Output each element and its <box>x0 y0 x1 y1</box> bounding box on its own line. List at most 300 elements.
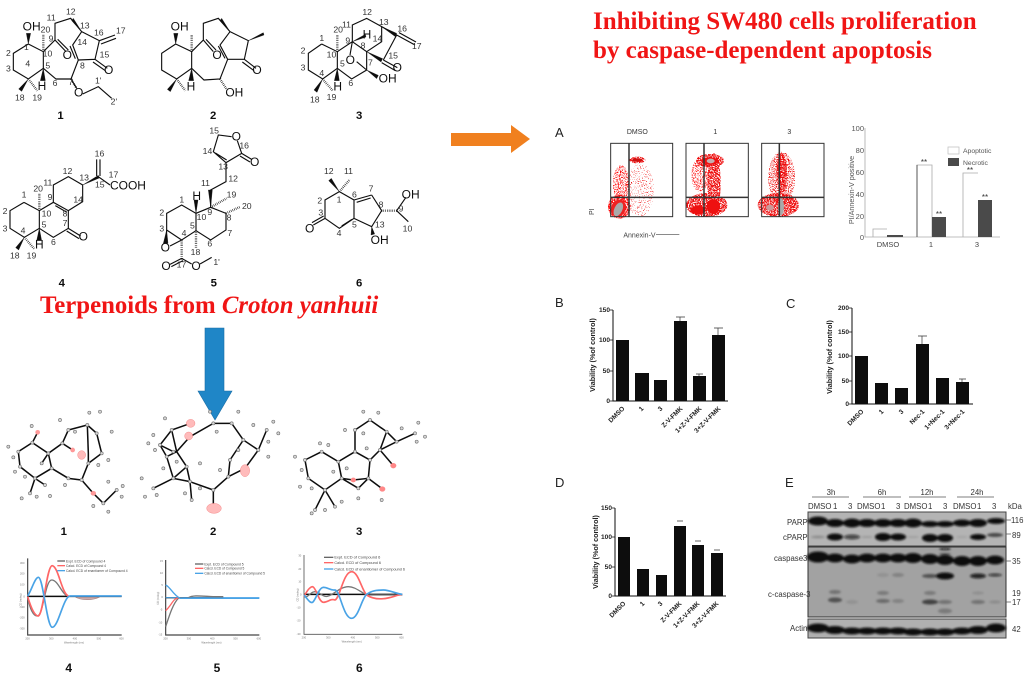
compound 3 structure: O <box>393 61 402 75</box>
lane labels: 3 <box>992 502 996 511</box>
time point headers: 6h <box>878 488 886 497</box>
significance stars: ** <box>936 210 942 219</box>
compound 5 structure: 14 <box>203 146 212 156</box>
compound 5 structure: 5 <box>211 278 217 290</box>
ECD chart compound 4: 300 <box>20 561 25 565</box>
ECD chart compound 6: 200 <box>302 635 307 639</box>
ECD chart compound 6: 600 <box>399 635 404 639</box>
compound 5 structure: 5 <box>190 220 195 230</box>
compound 5 structure: 4 <box>182 228 187 238</box>
panel C: viability bar chart: 3+Nec-1 <box>943 408 967 431</box>
panel C: viability bar chart: DMSO <box>846 408 865 427</box>
compound 5 structure: 8 <box>227 213 232 223</box>
ECD chart compound 6 <box>295 554 405 644</box>
panel C: viability bar chart: 150 <box>838 329 849 336</box>
molecular weight markers: 17 <box>1012 598 1021 607</box>
compound label 5: 5 <box>214 661 221 675</box>
panel: ECD spectra <box>19 554 405 675</box>
panel B: viability bar chart: 100 <box>599 337 610 344</box>
compound 3 structure: 16 <box>397 24 407 34</box>
panel C: viability bar chart: 50 <box>842 378 849 385</box>
compound 1 structure: 18 <box>15 93 25 103</box>
compound 6 structure: 2 <box>317 195 322 205</box>
panel D: viability bar chart: 100 <box>601 534 612 541</box>
time point headers: 3h <box>827 488 835 497</box>
compound 6 structure <box>305 166 420 290</box>
ECD chart compound 5: -10 <box>158 620 163 624</box>
ECD chart compound 6: 30 <box>298 554 302 558</box>
blot bands <box>807 516 1006 636</box>
compound 5 structure: 19 <box>227 189 236 199</box>
crystal structure 3: 3 <box>356 526 362 538</box>
compound 3 structure: O <box>346 53 355 67</box>
compound 3 structure: 18 <box>310 95 320 105</box>
ECD chart compound 5 <box>156 559 265 645</box>
compound 1 structure: 11 <box>47 13 56 23</box>
ECD chart compound 4: -100 <box>19 605 25 609</box>
blot membranes <box>808 512 1006 638</box>
compound 5 structure: 1 <box>179 195 184 205</box>
compound 5 structure: 3 <box>159 224 164 234</box>
molecular weight markers: 19 <box>1012 589 1021 598</box>
compound 1 structure <box>6 6 126 122</box>
panel B: viability bar chart: 150 <box>599 307 610 314</box>
ECD chart compound 4: 500 <box>97 636 102 640</box>
ECD chart compound 6: 300 <box>326 635 331 639</box>
compound 3 structure: 11 <box>342 19 351 29</box>
crystal structure 2: 2 <box>210 526 216 538</box>
compound 2 structure: 2 <box>210 110 216 122</box>
ECD chart compound 6: Wavelength (nm) <box>342 640 362 644</box>
ECD chart compound 4: 300 <box>49 636 54 640</box>
lane labels: 1 <box>928 502 932 511</box>
flow plot compound 3 <box>758 129 824 217</box>
panel B: viability bar chart: Z-V-FMK <box>661 405 685 429</box>
ECD chart compound 5: 5 <box>161 583 163 587</box>
panel D label: D <box>555 475 564 490</box>
compound 3 structure: 15 <box>388 50 398 60</box>
y axis tick labels: 0 <box>860 233 864 242</box>
panel B: viability bar chart: 1 <box>638 405 646 413</box>
compound 4 structure: 6 <box>51 237 56 247</box>
compound 4 structure: 18 <box>10 250 20 260</box>
compound 5 structure: 13 <box>218 161 228 171</box>
significance stars <box>921 158 988 219</box>
compound 1 structure: 5 <box>45 60 50 70</box>
compound 3 structure: 10 <box>327 49 336 59</box>
ECD chart compound 6: -10 <box>297 605 301 609</box>
panel D: viability bar chart: Z-V-FMK <box>660 600 684 624</box>
lane labels: DMSO <box>904 502 927 511</box>
protein labels: caspase3 <box>774 554 807 563</box>
compound 5 structure: 9 <box>207 207 212 217</box>
molecular weight markers: 35 <box>1012 557 1021 566</box>
y axis tick labels: 60 <box>856 168 864 177</box>
ECD chart compound 5: 200 <box>163 636 168 640</box>
ECD chart compound 4: 600 <box>119 636 124 640</box>
compound 4 structure: 17 <box>109 169 118 179</box>
compound 4 structure: H <box>35 238 44 252</box>
compound 5 structure: O <box>161 259 171 273</box>
legend: Apoptotic <box>963 148 992 155</box>
ECD chart compound 6: -20 <box>297 619 301 623</box>
ECD chart compound 5: 600 <box>257 636 262 640</box>
ECD chart compound 4: 400 <box>73 636 78 640</box>
ECD chart compound 4: Wavelength (nm) <box>64 641 84 645</box>
panel: X-ray crystal structures <box>8 412 425 538</box>
ECD chart compound 6: 10 <box>298 579 302 583</box>
compound 5 structure: 6 <box>207 239 212 249</box>
lane labels: DMSO <box>953 502 976 511</box>
compound 6 structure: OH <box>371 233 389 247</box>
panel C: viability bar chart: 0 <box>845 401 849 408</box>
compound 6 structure: 12 <box>324 166 334 176</box>
compound 4 structure: 1 <box>22 190 27 200</box>
ECD chart compound 5: Wavelength (nm) <box>201 641 222 645</box>
ECD chart compound 4: CD (mdeg) <box>19 593 23 606</box>
compound 3 structure: 14 <box>373 34 382 44</box>
ECD chart compound 4 <box>19 558 128 645</box>
ECD chart compound 6: CD (mdeg) <box>295 588 299 601</box>
compound 1 structure: 3 <box>6 64 11 74</box>
compound 6 structure: 9 <box>399 204 404 214</box>
panel B: viability bar chart: Viability (%of control) <box>588 318 597 392</box>
compound 6 structure: 4 <box>337 228 342 238</box>
compound 4 structure: 19 <box>27 250 36 260</box>
ECD chart compound 4: Calcd. ECD of Compound 4 <box>66 564 106 568</box>
compound 4 structure: 10 <box>42 209 51 219</box>
compound 1 structure: 20 <box>41 24 50 34</box>
panel: chemical structures of compounds 1-3 <box>6 6 422 122</box>
panel C: viability bar chart: 3 <box>898 408 906 416</box>
bars <box>873 165 978 237</box>
compound 3 structure: 12 <box>362 7 372 17</box>
y axis tick labels: 40 <box>856 190 864 199</box>
ECD chart compound 5: 10 <box>160 571 163 575</box>
panel B: viability bar chart: 3 <box>657 405 665 413</box>
compound 3 structure: H <box>333 80 342 94</box>
compound 4 structure: 2 <box>3 206 8 216</box>
compound 3 structure: 3 <box>301 63 306 73</box>
ECD chart compound 5: 15 <box>160 559 163 563</box>
ECD chart compound 5: 500 <box>233 636 238 640</box>
significance stars: ** <box>982 193 988 202</box>
ECD chart compound 4: 100 <box>20 583 25 587</box>
molecular weight markers: 42 <box>1012 625 1021 634</box>
compound 4 structure <box>3 149 146 290</box>
compound 3 structure: 4 <box>319 68 324 78</box>
ECD chart compound 4: 200 <box>20 572 25 576</box>
compound 6 structure: 6 <box>352 189 357 199</box>
compound 6 structure: 7 <box>369 184 374 194</box>
compound 4 structure: COOH <box>110 178 146 192</box>
panel B: viability bar chart: 1+Z-V-FMK <box>674 405 704 435</box>
panel D: viability bar chart: 1+Z-V-FMK <box>672 600 702 630</box>
panel D: viability bar chart: 3+Z-V-FMK <box>691 600 721 630</box>
compound 2 structure: O <box>212 48 222 62</box>
panel C label: C <box>786 296 795 311</box>
compound 4 structure: 3 <box>3 224 8 234</box>
ECD chart compound 5: -5 <box>160 608 163 612</box>
compound 3 structure: 7 <box>368 57 373 67</box>
flow plot compound 1 <box>686 129 748 217</box>
compound 5 structure: H <box>192 189 201 203</box>
compound 6 structure: O <box>305 221 314 235</box>
panel A label: A <box>555 125 564 140</box>
panel B: viability bar chart <box>588 307 728 435</box>
compound 1 structure: 15 <box>100 49 109 59</box>
ECD chart compound 6: 500 <box>375 635 380 639</box>
x category labels: 1 <box>929 240 933 249</box>
compound 4 structure: 4 <box>21 225 26 235</box>
heading: Terpenoids from Croton yanhuii: Terpenoids from Croton yanhuii <box>40 292 378 319</box>
compound 4 structure: 14 <box>73 195 83 205</box>
compound 6 structure: 5 <box>352 219 357 229</box>
compound 1 structure: 1 <box>24 42 29 52</box>
significance stars: ** <box>921 158 927 167</box>
compound 4 structure: 20 <box>33 184 43 194</box>
panel A: apoptotic necrotic bar chart <box>847 124 1000 249</box>
crystal structure 1 <box>8 412 123 538</box>
compound 1 structure: 12 <box>66 6 76 16</box>
molecular weight markers: 116 <box>1011 516 1023 525</box>
ECD chart compound 5: Calcd. ECD of enantiomer of Compound 5 <box>204 572 265 576</box>
panel B label: B <box>555 295 564 310</box>
compound 3 structure: 5 <box>340 59 345 69</box>
ECD chart compound 5: CD (mdeg) <box>156 592 160 605</box>
compound label 6: 6 <box>356 661 363 675</box>
compound 3 structure <box>301 7 422 122</box>
panel C: viability bar chart: Viability (%of control) <box>825 320 834 394</box>
ECD chart compound 4: -300 <box>19 626 25 630</box>
compound 3 structure: 3 <box>356 110 362 122</box>
y axis title: PI/Annexin-V positive <box>847 156 856 224</box>
compound 4 structure: 13 <box>79 173 89 183</box>
ECD chart compound 4: Calcd. ECD of enantiomer of Compound 4 <box>66 569 128 573</box>
ECD chart compound 5: -15 <box>158 632 163 636</box>
molecular weight markers: 89 <box>1012 531 1021 540</box>
compound 3 structure: H <box>363 27 371 41</box>
flow plot DMSO: DMSO <box>627 129 648 136</box>
panel D: viability bar chart: 50 <box>605 564 612 571</box>
compound 4 structure: 8 <box>63 209 68 219</box>
compound label 4: 4 <box>65 661 72 675</box>
compound 3 structure: 17 <box>412 41 422 51</box>
panel C: viability bar chart <box>825 305 973 431</box>
ECD chart compound 5: 0 <box>161 595 163 599</box>
panel B: viability bar chart: 3+Z-V-FMK <box>693 405 723 435</box>
panel D: viability bar chart: 150 <box>601 505 612 512</box>
lane labels: kDa <box>1008 502 1023 511</box>
panel: chemical structures of compounds 4-6 <box>3 125 420 290</box>
compound 6 structure: 3 <box>318 208 323 218</box>
ECD chart compound 6: 400 <box>351 635 356 639</box>
panel D: viability bar chart <box>591 505 726 630</box>
title: Inhibiting SW480 cells proliferation by caspase-dependent apoptosis: by caspase-dependent apoptosis <box>593 37 932 64</box>
lane labels: 1 <box>833 502 837 511</box>
crystal structure 2 <box>142 412 278 538</box>
compound 5 structure: 16 <box>239 140 249 150</box>
time point headers <box>812 488 994 497</box>
compound 6 structure: 11 <box>344 166 353 176</box>
compound 1 structure: 1 <box>57 110 64 122</box>
panel E label: E <box>785 475 794 490</box>
ECD chart compound 6: -30 <box>297 632 301 636</box>
compound 2 structure: O <box>252 63 262 77</box>
compound 2 structure: OH <box>171 20 189 34</box>
molecular weight markers <box>1006 516 1023 634</box>
compound 5 structure: O <box>232 130 241 144</box>
panel D: viability bar chart: 1 <box>639 600 647 608</box>
flow axis labels <box>589 208 679 239</box>
compound 3 structure: 13 <box>379 17 389 27</box>
panel D: viability bar chart: 0 <box>608 593 612 600</box>
lane labels: 3 <box>943 502 947 511</box>
compound 1 structure: O <box>74 86 83 100</box>
y axis tick labels <box>851 124 864 242</box>
lane labels: DMSO <box>808 502 831 511</box>
ECD chart compound 6: Expt. ECD of Compound 6 <box>334 556 380 560</box>
compound 5 structure: O <box>191 259 201 273</box>
compound 6 structure: OH <box>402 187 420 201</box>
compound 1 structure: 2' <box>111 96 117 106</box>
compound 4 structure: 7 <box>63 218 68 228</box>
compound 1 structure: 19 <box>32 93 42 103</box>
compound 1 structure: 2 <box>6 48 11 58</box>
panel C: viability bar chart: 100 <box>838 353 849 360</box>
compound 1 structure: 1' <box>95 75 102 85</box>
compound 6 structure: 13 <box>375 219 385 229</box>
flow axis labels: PI <box>589 208 596 215</box>
panel E: western blot <box>768 488 1023 638</box>
compound 5 structure <box>159 125 259 290</box>
compound 4 structure: 4 <box>59 278 66 290</box>
ECD chart compound 6: Calcd. ECD of Compound 6 <box>334 561 381 565</box>
panel D: viability bar chart: Viability (%of control) <box>591 515 600 589</box>
y axis tick labels: 80 <box>856 146 864 155</box>
ECD chart compound 4: 200 <box>25 636 30 640</box>
ECD chart compound 6: 0 <box>300 593 302 597</box>
compound 6 structure: 8 <box>379 199 384 209</box>
compound 6 structure: 1 <box>337 195 342 205</box>
panel C: viability bar chart: 1 <box>878 408 886 416</box>
ECD chart compound 4: Expt. ECD of Compound 4 <box>66 559 105 563</box>
compound 3 structure: 6 <box>348 78 353 88</box>
arrow: blue down arrow <box>198 328 232 420</box>
compound 1 structure: O <box>104 63 113 77</box>
crystal structure 3 <box>295 412 425 538</box>
lane labels: 1 <box>977 502 981 511</box>
compound 3 structure: 9 <box>345 35 350 45</box>
compound 4 structure: 5 <box>42 219 47 229</box>
compound 2 structure: H <box>187 80 195 94</box>
compound 5 structure: 7 <box>227 228 232 238</box>
compound 4 structure: 15 <box>95 179 105 189</box>
time point headers: 24h <box>970 488 984 497</box>
compound 1 structure: 9 <box>49 33 54 43</box>
compound 4 structure: 12 <box>63 166 72 176</box>
title: Inhibiting SW480 cells proliferation by caspase-dependent apoptosis: Inhibiting SW480 cells proliferation <box>593 8 977 35</box>
protein labels: PARP <box>787 518 808 527</box>
flow plot compound 3: 3 <box>787 129 791 136</box>
ECD chart compound 4: -200 <box>19 616 25 620</box>
panel A: flow cytometry scatter plots <box>589 129 824 239</box>
compound 1 structure: 17 <box>116 25 126 35</box>
compound 5 structure: 11 <box>201 178 210 188</box>
compound 5 structure: 18 <box>191 247 200 257</box>
arrow: orange right arrow <box>451 125 530 153</box>
lane labels: 3 <box>848 502 852 511</box>
compound 1 structure: 14 <box>77 37 87 47</box>
ECD chart compound 6: Calcd. ECD of enantiomer of Compound 6 <box>334 567 405 571</box>
ECD chart compound 5: Expt. ECD of Compound 5 <box>204 562 244 566</box>
panel D: viability bar chart: DMSO <box>608 600 627 619</box>
compound 5 structure: O <box>250 155 259 169</box>
compound 3 structure: OH <box>379 71 397 85</box>
protein labels: Actin <box>790 624 807 633</box>
compound 4 structure: 9 <box>48 192 53 202</box>
protein labels: c-caspase-3 <box>768 590 810 599</box>
flow axis labels: Annexin-V <box>623 232 656 239</box>
compound 6 structure: 10 <box>403 223 412 233</box>
compound 1 structure: 8 <box>80 60 85 70</box>
compound 3 structure: 8 <box>361 40 366 50</box>
compound 5 structure: 1' <box>213 257 220 267</box>
compound 3 structure: 1 <box>319 33 324 43</box>
compound 1 structure: 6 <box>53 78 58 88</box>
legend <box>948 147 992 167</box>
compound 5 structure: 17 <box>177 259 186 269</box>
x category labels: DMSO <box>877 240 899 249</box>
panel C: viability bar chart: 1+Nec-1 <box>923 408 947 431</box>
ECD chart compound 4: 0 <box>23 594 25 598</box>
lane labels: DMSO <box>857 502 880 511</box>
title: Inhibiting SW480 cells proliferation by caspase-dependent apoptosis <box>593 8 977 64</box>
y axis tick labels: 100 <box>851 124 864 133</box>
x category labels: 3 <box>975 240 979 249</box>
panel D: viability bar chart: 3 <box>657 600 665 608</box>
compound 5 structure: 15 <box>209 125 219 135</box>
panel B: viability bar chart: 50 <box>603 368 610 375</box>
compound 2 structure <box>162 18 264 122</box>
y axis tick labels: 20 <box>856 212 864 221</box>
compound 3 structure: 2 <box>301 45 306 55</box>
compound 5 structure: 10 <box>197 212 206 222</box>
panel C: viability bar chart: 200 <box>838 305 849 312</box>
flow plot compound 1: 1 <box>713 129 717 136</box>
lane labels: 1 <box>881 502 885 511</box>
compound 1 structure: 4 <box>25 59 30 69</box>
compound 5 structure: 12 <box>228 174 238 184</box>
compound 6 structure: 6 <box>356 278 362 290</box>
ECD chart compound 6: 20 <box>298 567 302 571</box>
compound 1 structure: 7 <box>68 77 73 87</box>
compound 3 structure: 19 <box>327 92 336 102</box>
x category labels <box>877 240 979 249</box>
protein labels <box>768 518 810 633</box>
protein labels: cPARP <box>783 533 808 542</box>
ECD chart compound 5: 400 <box>210 636 215 640</box>
compound 2 structure: OH <box>225 86 243 100</box>
time point headers: 12h <box>920 488 934 497</box>
compound 4 structure: 16 <box>95 149 104 159</box>
ECD chart compound 5: Calcd. ECD of Compound 5 <box>204 567 244 571</box>
panel B: viability bar chart: 0 <box>606 398 610 405</box>
compound 1 structure: O <box>63 48 72 62</box>
panel C: viability bar chart: Nec-1 <box>909 408 927 426</box>
compound 4 structure: O <box>79 230 88 244</box>
compound 1 structure: 13 <box>80 21 90 31</box>
